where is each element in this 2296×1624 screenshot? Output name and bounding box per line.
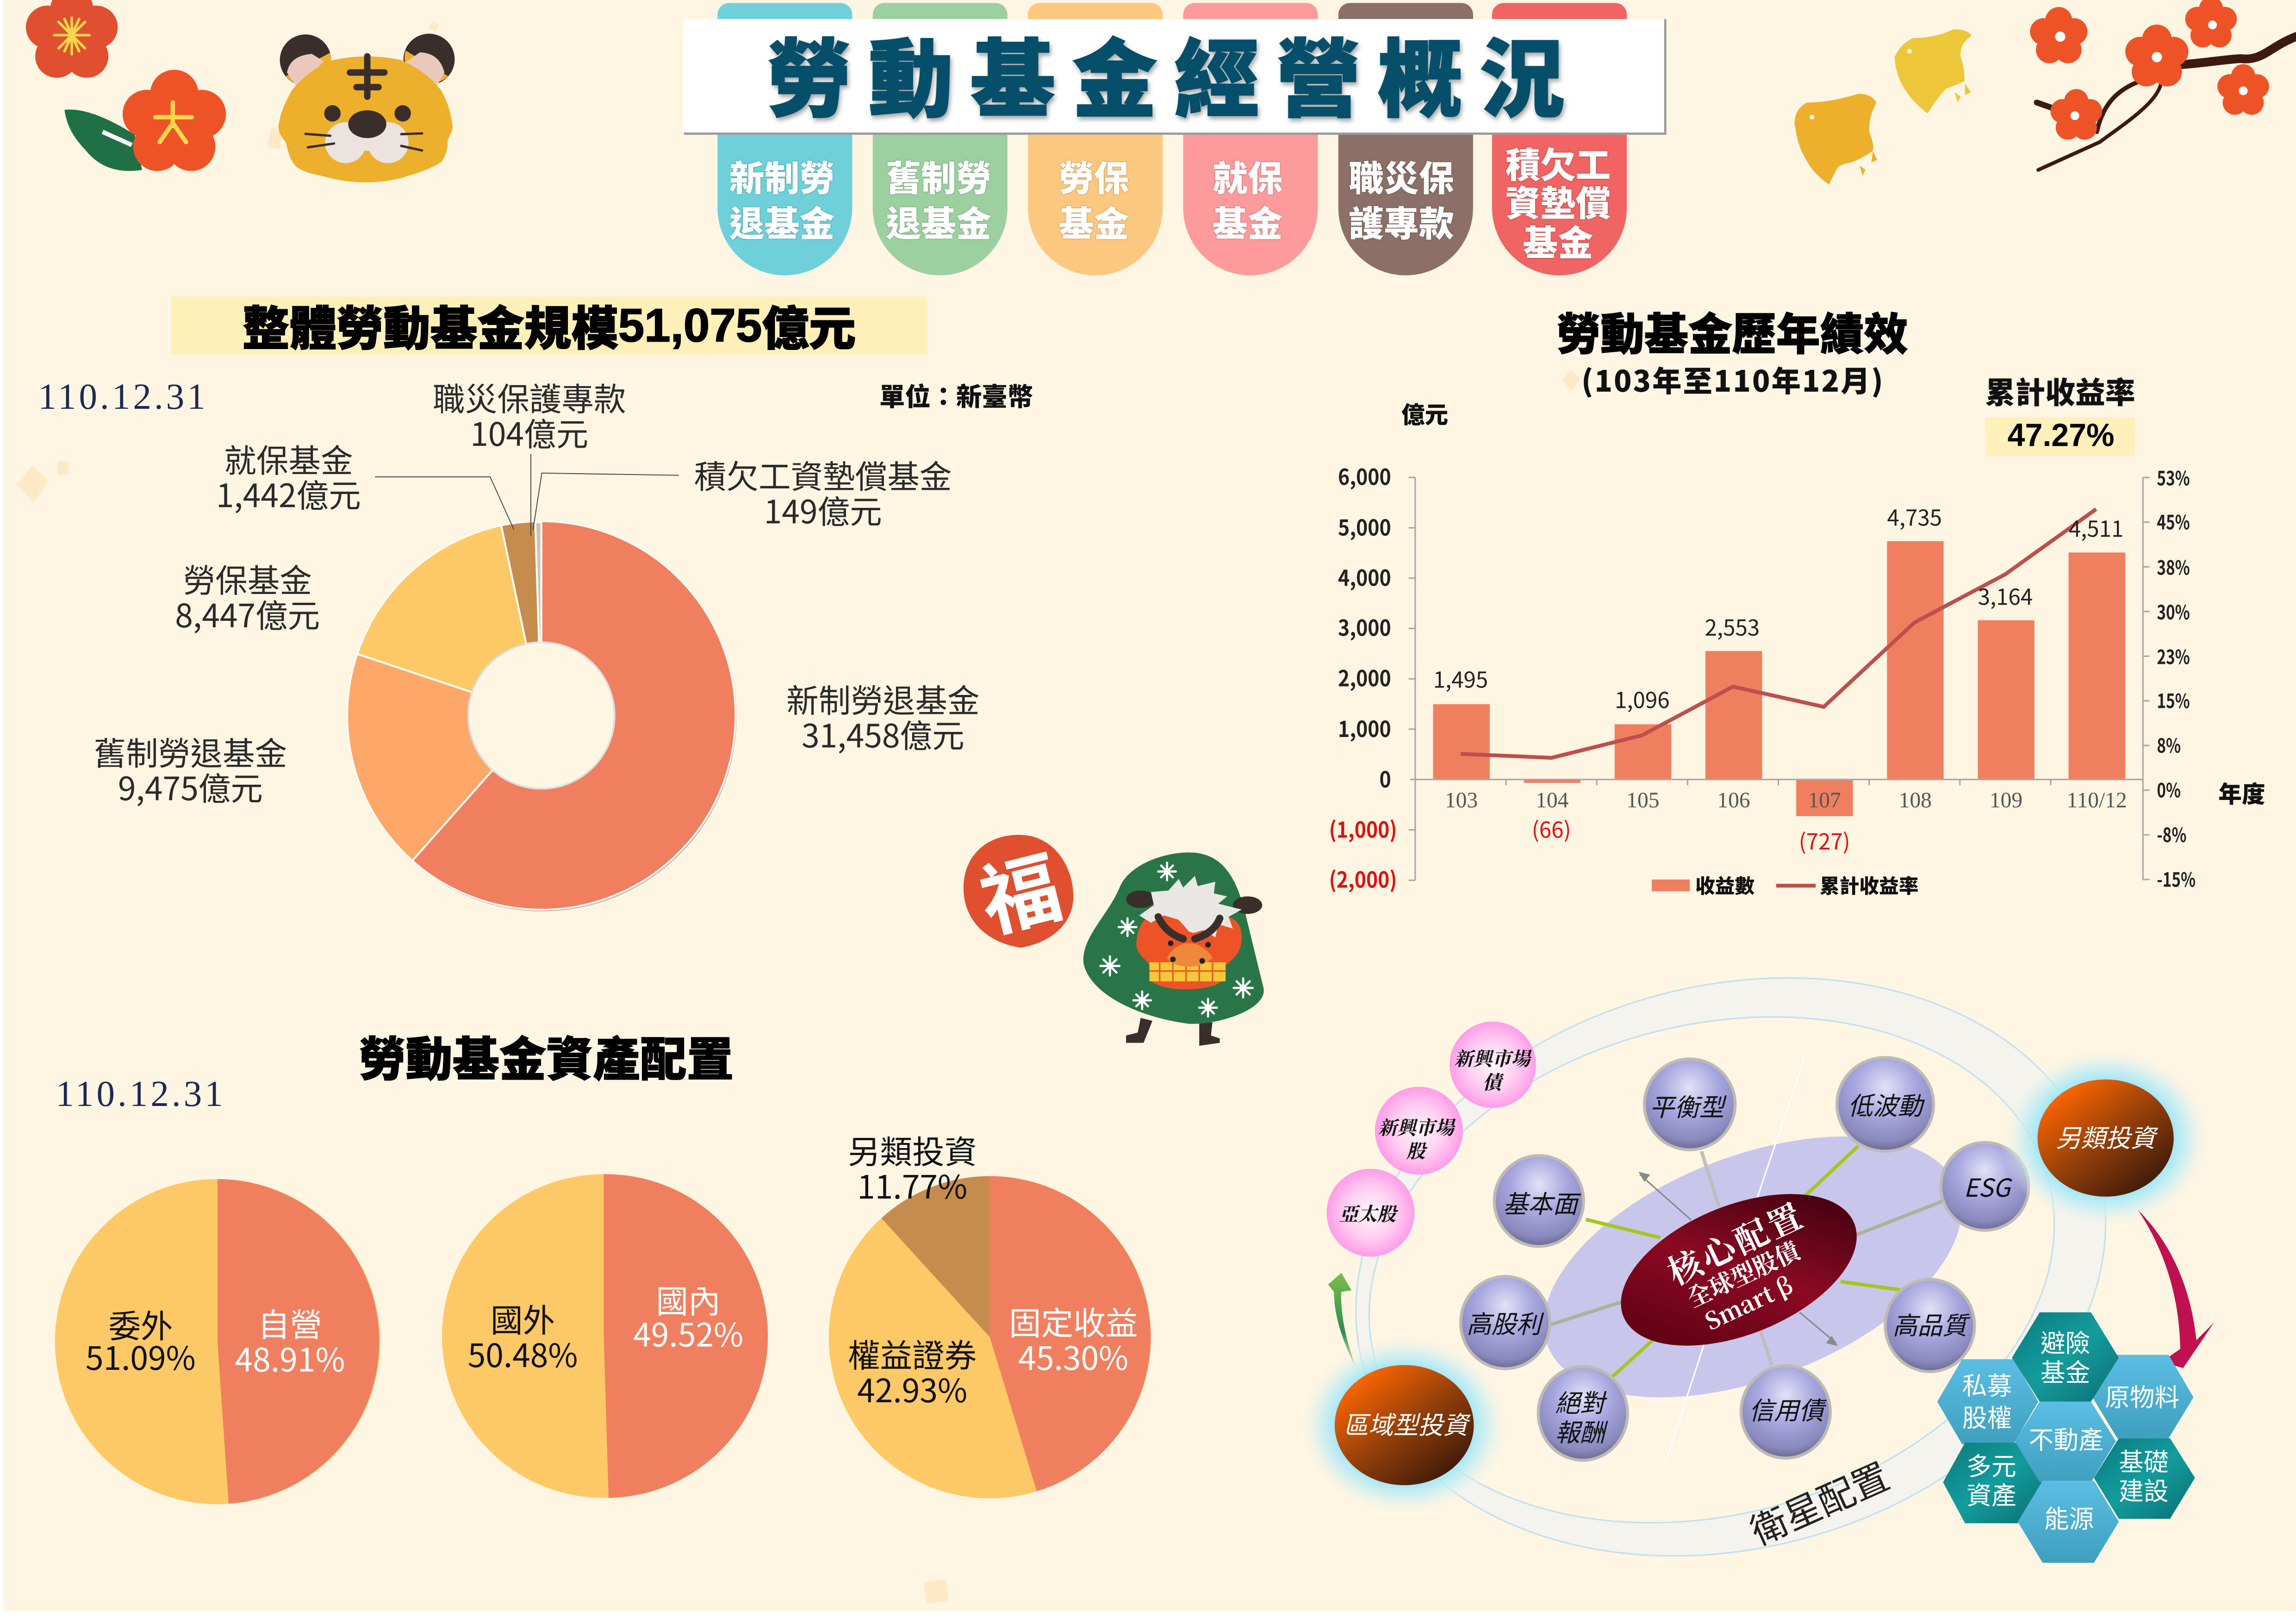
label: 勞保基金: 勞保基金 [183, 555, 312, 602]
icon: bird 1 [1794, 94, 1877, 185]
right axis labels: 38% [2157, 553, 2190, 581]
hex: 私募股權 [1937, 1359, 2038, 1444]
label: 舊制勞退基金 [94, 728, 287, 810]
leader lines [375, 454, 679, 536]
pie: 自營委外: 自營 [258, 1299, 322, 1346]
sphere: 低波動: 低波動 [1848, 1087, 1925, 1122]
label: 新制勞退基金: 31,458億元 [802, 711, 964, 757]
sphere: 絕對報酬: 絕對 [1555, 1384, 1607, 1419]
tab: 新制勞退基金: 退基金 [729, 196, 835, 247]
icon: plum branch [2030, 0, 2296, 170]
pink node: 新興市場股: 股 [1406, 1136, 1428, 1163]
hex: 避險基金: 避險 [2041, 1324, 2090, 1360]
arrow: green [1328, 1273, 1357, 1371]
connectors [1548, 1146, 1943, 1378]
hex: 原物料: 原物料 [2105, 1378, 2179, 1414]
category labels: 103 [1445, 788, 1478, 812]
sphere: 高股利: 高股利 [1467, 1305, 1544, 1340]
ring label: 衛星配置 [1741, 1447, 1896, 1555]
pink node: 新興市場股: 新興市場 [1378, 1112, 1456, 1140]
category labels: 108 [1899, 788, 1932, 812]
icon: lion dance [1083, 852, 1264, 1046]
decorative confetti [16, 22, 1580, 1604]
left axis labels: 1,000 [1338, 712, 1391, 744]
icon: tabs [717, 3, 1627, 275]
pie: 資產類別: 42.93% [857, 1365, 967, 1412]
tab: 積欠工資墊償基金: 基金 [1523, 215, 1593, 266]
tab: 就保基金: 就保 [1213, 150, 1283, 201]
left axis labels: 5,000 [1338, 511, 1391, 543]
date: asset allocation: 110.12.31 [56, 1074, 226, 1114]
sphere: 絕對報酬 [1538, 1367, 1628, 1460]
tab: 職災保護專款: 護專款 [1349, 196, 1454, 247]
glow node: 區域型投資: 區域型投資 [1344, 1406, 1471, 1442]
tab: 積欠工資墊償基金: 積欠工 [1505, 137, 1611, 188]
right axis labels: 53% [2157, 463, 2190, 492]
tab: 職災保護專款: 職災保 [1349, 150, 1454, 201]
tab: 新制勞退基金: 新制勞 [729, 150, 834, 201]
tab: 積欠工資墊償基金 [1492, 3, 1627, 275]
category labels [1445, 788, 2127, 812]
left axis labels: 2,000 [1338, 662, 1391, 693]
left axis labels: (2,000) [1329, 863, 1397, 894]
pink node: 新興市場股 [1375, 1087, 1463, 1174]
core center: 全球型股債 [1680, 1230, 1807, 1314]
hex: 私募股權: 私募 [1962, 1366, 2012, 1402]
diagram: core satellite [1290, 897, 2214, 1624]
sphere: 信用債 [1741, 1366, 1830, 1458]
sphere: 高股利 [1461, 1276, 1550, 1369]
icon: plum flower top left [26, 0, 118, 78]
glow node: 另類投資 [2000, 1047, 2211, 1229]
sphere: 絕對報酬: 報酬 [1555, 1413, 1608, 1449]
sphere: 高品質 [1885, 1280, 1974, 1372]
label: 就保基金: 就保基金 [224, 435, 353, 482]
legend [1652, 870, 1918, 899]
sphere: 信用債: 信用債 [1749, 1391, 1827, 1427]
cumulative return callout: 累計收益率 [1985, 369, 2135, 412]
sphere: 平衡型 [1644, 1059, 1735, 1150]
pink node: 亞太股: 亞太股 [1339, 1199, 1399, 1226]
category labels: 105 [1626, 788, 1659, 812]
data labels: 2,553 [1705, 610, 1760, 642]
pink node: 新興市場債: 新興市場 [1454, 1044, 1532, 1071]
tab: 勞保基金: 基金 [1059, 196, 1129, 247]
pie: 自營委外: 51.09% [86, 1333, 196, 1380]
label: 新制勞退基金 [786, 675, 980, 757]
icon: 福 stamp: 福 [967, 824, 1071, 954]
core center: Smart β [1699, 1267, 1798, 1337]
right axis labels: 30% [2157, 597, 2190, 626]
pink node: 新興市場債: 債 [1482, 1067, 1504, 1094]
pie: 自營委外: 48.91% [235, 1334, 345, 1381]
hex: 私募股權: 股權 [1962, 1399, 2012, 1434]
hex: 能源: 能源 [2044, 1499, 2094, 1535]
right axis labels: 45% [2157, 507, 2190, 536]
pie: 國內國外 [442, 1174, 768, 1498]
label: 職災保護專款: 職災保護專款 [433, 374, 626, 420]
legend: 累計收益率 [1820, 870, 1918, 899]
unit note: 單位：新臺幣 [879, 376, 1033, 413]
right axis labels: -15% [2157, 865, 2196, 893]
hex: 基礎建設 [2094, 1438, 2195, 1519]
label: 積欠工資墊償基金: 149億元 [764, 486, 882, 533]
pink node: 新興市場債 [1450, 1022, 1536, 1108]
left axis labels [1329, 460, 1397, 894]
tab: 職災保護專款 [1338, 3, 1473, 275]
right axis labels: 15% [2157, 686, 2190, 714]
data labels: 1,096 [1615, 683, 1670, 715]
axis arrows [1640, 1059, 1836, 1465]
line: cumulative return [1461, 509, 2096, 758]
pie: 資產類別: 固定收益 [1009, 1298, 1138, 1344]
right axis labels: -8% [2157, 820, 2186, 848]
hex: 避險基金 [2012, 1312, 2119, 1402]
cumulative return callout [1985, 369, 2135, 456]
tab: 就保基金: 基金 [1213, 196, 1283, 247]
right axis labels [2157, 463, 2196, 893]
data labels: 4,511 [2069, 511, 2123, 543]
tab: 舊制勞退基金: 舊制勞 [886, 150, 991, 201]
data labels: 1,495 [1433, 662, 1488, 694]
label: 職災保護專款 [433, 374, 626, 456]
pie: 國內國外: 50.48% [468, 1330, 578, 1377]
hex: 多元資產: 多元 [1966, 1447, 2016, 1482]
axis label: 年度: 年度 [2218, 775, 2265, 810]
heading: performance: 勞動基金歷年績效 [1556, 300, 1908, 363]
label: 新制勞退基金: 新制勞退基金 [786, 675, 980, 722]
left axis labels: (1,000) [1329, 813, 1397, 844]
pie: 國內國外: 49.52% [633, 1310, 743, 1356]
data labels: (66) [1532, 812, 1571, 844]
core ellipse [1508, 1084, 1997, 1449]
tab: 勞保基金: 勞保 [1059, 150, 1129, 201]
tab: 勞保基金 [1028, 3, 1163, 275]
icon: plum flower with leaf [123, 70, 226, 171]
label: 積欠工資墊償基金: 積欠工資墊償基金 [694, 451, 952, 498]
data labels: 4,735 [1887, 500, 1942, 532]
glow node: 區域型投資 [1299, 1334, 1510, 1516]
icon: bird 2 [1895, 29, 1972, 113]
left axis labels: 0 [1379, 762, 1391, 794]
pie: 自營委外: 委外 [108, 1301, 173, 1348]
category labels: 107 [1808, 788, 1841, 812]
satellite ring [1290, 897, 2171, 1624]
sphere: 高品質: 高品質 [1892, 1306, 1971, 1342]
label: 職災保護專款: 104億元 [470, 409, 588, 456]
bars [1433, 541, 2125, 816]
glow node: 另類投資: 另類投資 [2056, 1119, 2158, 1155]
hex: 基礎建設: 基礎 [2119, 1443, 2169, 1478]
sphere: 低波動 [1837, 1057, 1934, 1151]
label: 就保基金 [216, 435, 361, 517]
data labels [1433, 500, 2123, 856]
hex: 多元資產 [1943, 1443, 2043, 1523]
hex: 不動產 [2015, 1402, 2116, 1482]
title banner [683, 11, 1666, 135]
pie: 資產類別 [829, 1126, 1151, 1499]
tab: 新制勞退基金 [717, 3, 852, 275]
pie: 自營委外 [55, 1179, 380, 1504]
legend: 收益數 [1695, 870, 1755, 899]
sphere: 基本面 [1494, 1156, 1584, 1246]
data labels: 3,164 [1978, 580, 2033, 612]
right axis labels: 0% [2157, 775, 2181, 804]
pie: 國內國外: 國外 [491, 1295, 555, 1342]
unit: 億元: 億元 [1401, 396, 1448, 430]
title: 勞動基金經營概況 [766, 11, 1565, 134]
heading: asset allocation: 勞動基金資產配置 [359, 1022, 734, 1090]
core center: 核心配置 [1658, 1190, 1809, 1294]
category labels: 109 [1990, 788, 2022, 812]
hex: 能源 [2018, 1481, 2119, 1563]
tab: 舊制勞退基金 [873, 3, 1008, 275]
hex: 基礎建設: 建設 [2119, 1472, 2169, 1507]
pie: 資產類別: 11.77% [857, 1162, 967, 1208]
category labels: 104 [1536, 788, 1568, 812]
sphere: ESG: ESG [1964, 1168, 2013, 1204]
hexagon cluster [1937, 1312, 2195, 1563]
arrow: magenta [2138, 1210, 2214, 1368]
hex: 多元資產: 資產 [1966, 1476, 2016, 1512]
pink node: 亞太股 [1326, 1169, 1414, 1257]
left axis labels: 6,000 [1338, 460, 1391, 492]
right axis labels: 23% [2157, 642, 2190, 670]
right axis labels: 8% [2157, 731, 2181, 759]
donut chart [348, 521, 736, 912]
hex: 不動產: 不動產 [2029, 1420, 2103, 1456]
label: 舊制勞退基金: 9,475億元 [118, 763, 263, 810]
label: 勞保基金 [175, 555, 320, 637]
label: 勞保基金: 8,447億元 [175, 590, 320, 637]
tab: 積欠工資墊償基金: 資墊償 [1505, 175, 1611, 226]
category labels: 110/12 [2067, 788, 2127, 812]
heading: fund size: 整體勞動基金規模51,075億元 [243, 291, 856, 359]
sphere: 平衡型: 平衡型 [1649, 1088, 1727, 1124]
date: fund size: 110.12.31 [38, 377, 208, 417]
subheading: period: (103年至110年12月) [1581, 358, 1883, 400]
cumulative return callout: 47.27% [2008, 417, 2115, 453]
left axis labels: 3,000 [1338, 611, 1391, 643]
sphere: 基本面: 基本面 [1503, 1185, 1581, 1220]
hex: 原物料 [2092, 1355, 2193, 1438]
category labels: 106 [1717, 788, 1750, 812]
combo chart [1329, 460, 2196, 894]
icon: leaf [64, 110, 142, 171]
label: 積欠工資墊償基金 [694, 451, 952, 533]
icon: tiger head [279, 34, 454, 182]
pie: 國內國外: 國內 [656, 1276, 721, 1323]
label: 舊制勞退基金: 舊制勞退基金 [94, 728, 287, 775]
sphere: ESG [1941, 1143, 2029, 1230]
tab: 就保基金 [1183, 3, 1318, 275]
pie: 資產類別: 權益證券 [848, 1330, 977, 1377]
data labels: (727) [1799, 824, 1850, 856]
pie: 資產類別: 45.30% [1018, 1333, 1128, 1380]
core center [1599, 1163, 1879, 1376]
pie: 資產類別: 另類投資 [848, 1126, 977, 1173]
tab: 舊制勞退基金: 退基金 [886, 196, 991, 247]
left axis labels: 4,000 [1338, 561, 1391, 593]
hex: 避險基金: 基金 [2041, 1353, 2090, 1389]
label: 就保基金: 1,442億元 [216, 470, 361, 517]
